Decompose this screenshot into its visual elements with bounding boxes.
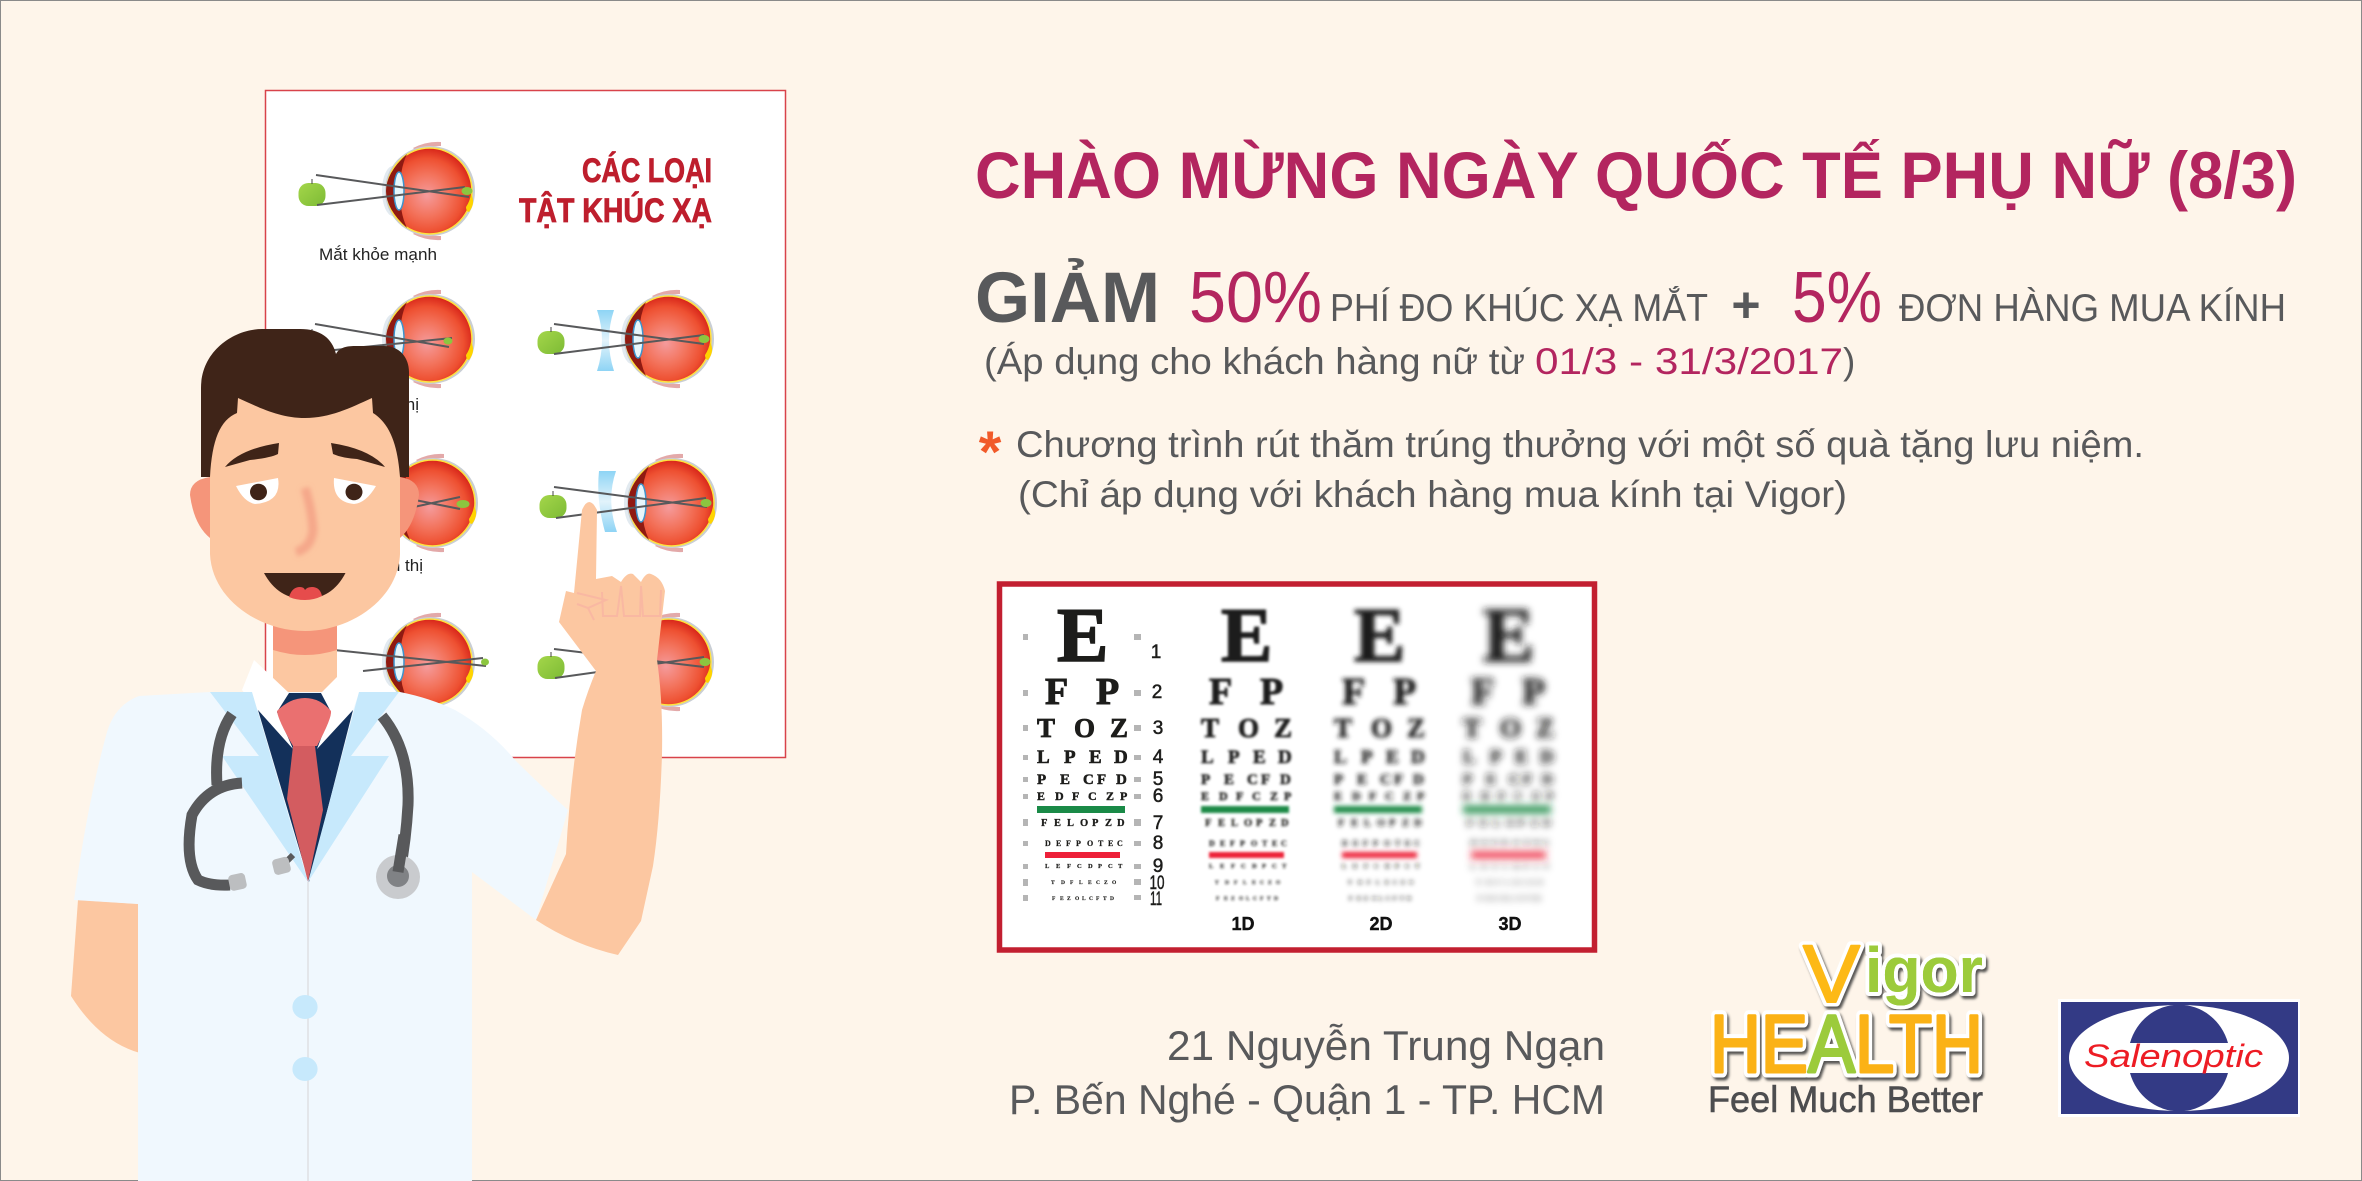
logo wordmark Vigor: igor (1865, 934, 1983, 1006)
diagram: corrected astigmatism eye (538, 613, 714, 711)
50 percent: 50% (1189, 258, 1322, 338)
eye chart: 2D blur column: FELOPZD (1338, 818, 1422, 829)
panel: refractive errors poster (266, 90, 786, 758)
eye chart: 2D blur column: EDFCZP (1334, 789, 1424, 803)
eye chart: 1D blur column: LEFCDPCT (1209, 863, 1287, 870)
illustration: doctor (71, 329, 665, 1181)
eye chart: column labels: 3D (1498, 914, 1522, 934)
eye chart: 3D blur column: FEZOLCFTD (1478, 896, 1540, 902)
eye chart: line numbers: 4 (1153, 747, 1164, 768)
doctor right arm and pointing hand (536, 502, 665, 955)
eye chart: 1D blur column: FP (1209, 671, 1283, 713)
coat centre seam (307, 882, 309, 1181)
eye chart: 2D blur column: PECFD (1334, 772, 1424, 788)
eye chart: line numbers: 5 (1153, 769, 1163, 790)
eye chart: column labels (1231, 914, 1522, 934)
eye test fee: PHÍ ĐO KHÚC XẠ MẮT (1330, 286, 1708, 330)
lucky draw note (1016, 424, 2144, 515)
hand finger creases (577, 586, 661, 620)
eye chart: 2D blur column (1334, 592, 1425, 902)
address: 21 Nguyễn Trung Ngạn (1167, 1022, 1605, 1069)
eye chart: line numbers: 7 (1153, 813, 1163, 834)
5 percent: 5% (1792, 258, 1882, 338)
lucky draw note: Chương trình rút thăm trúng thưởng với một số quà tặng lưu niệm. (1016, 424, 2144, 465)
eye chart: sharp column: FEZOLCFTD (1052, 896, 1114, 902)
eye chart: 1D blur column: LPED (1201, 747, 1292, 768)
eye chart: sharp column (1037, 592, 1128, 902)
order discount: ĐƠN HÀNG MUA KÍNH (1899, 287, 2286, 330)
doctor face (210, 390, 400, 631)
doctor eyebrows (225, 443, 385, 467)
eye chart: sharp column: EDFCZP (1037, 789, 1127, 803)
diagram: hyperopia eye (385, 454, 478, 552)
eye chart: 3D blur column: DEFPOTEC (1471, 839, 1549, 848)
eye chart: line numbers (1150, 642, 1164, 910)
eye chart: 1D blur column: PECFD (1201, 772, 1291, 788)
eye chart: 1D blur column: FEZOLCFTD (1216, 896, 1278, 902)
diagram: corrected hyperopia eye (540, 454, 717, 552)
logo wordmark Vigor: V (1803, 929, 1860, 1020)
eye chart: acuity side marks (1023, 634, 1141, 901)
applicable dates (984, 341, 1855, 382)
eye chart: 2D blur column: FEZOLCFTD (1349, 896, 1411, 902)
eye chart: 3D blur column (1463, 592, 1554, 902)
word: discount: GIẢM (975, 259, 1160, 338)
eye chart: 2D blur column: LEFCDPCT (1342, 863, 1420, 870)
eye chart: line numbers: 9 (1153, 856, 1163, 877)
logo wordmark Vigor: V (1803, 929, 1860, 1020)
eye chart: sharp column: FP (1045, 671, 1119, 713)
poster heading: TẬT KHÚC XẠ (519, 192, 712, 230)
eye chart: 3D blur column: LPED (1463, 747, 1554, 768)
eye chart: 2D blur column: TOZ (1334, 713, 1425, 743)
diagram: myopia eye (298, 290, 475, 388)
doctor coat (74, 692, 568, 1181)
doctor collar (242, 660, 360, 749)
eye chart: 3D blur column: EDFCZP (1463, 789, 1553, 803)
logo tagline: Feel Much Better (1708, 1079, 1983, 1120)
eye chart: sharp column: DEFPOTEC (1045, 839, 1123, 848)
logo wordmark Vigor (1803, 929, 1983, 1020)
panel: eye chart (1000, 584, 1594, 950)
diagram: astigmatism eye (315, 613, 489, 711)
doctor lapels (210, 692, 399, 882)
offer line (975, 258, 2286, 338)
eye chart: 1D blur column: FELOPZD (1205, 818, 1289, 829)
eye chart: column labels: 1D (1231, 914, 1255, 934)
logo wordmark Health: HEALTH (1710, 999, 1983, 1090)
eye chart: sharp column: LPED (1037, 747, 1128, 768)
eye chart: 3D blur column: FP (1471, 671, 1545, 713)
eye chart: 3D blur column: PECFD (1463, 772, 1553, 788)
eye chart: sharp column: TOZ (1037, 713, 1128, 743)
doctor neck (273, 620, 337, 700)
address (1009, 1022, 1605, 1123)
doctor left arm (71, 900, 140, 1053)
title: CHÀO MỪNG NGÀY QUỐC TẾ PHỤ NỮ (8/3) (975, 138, 2297, 212)
eye chart: line numbers: 2 (1152, 682, 1162, 703)
poster heading (519, 152, 712, 230)
logo: Salenoptic (2058, 999, 2300, 1117)
eye chart: 1D blur column: TDFLECZO (1215, 880, 1281, 886)
doctor mouth (264, 573, 346, 600)
plus sign: + (1731, 277, 1761, 333)
diagram: corrected myopia eye (538, 290, 714, 388)
label: hyperopia: Viễn thị (367, 556, 423, 575)
coat buttons (292, 995, 318, 1081)
asterisk: * (979, 420, 1002, 485)
eye chart: line numbers: 1 (1151, 642, 1161, 663)
eye chart: 1D blur column: TOZ (1201, 713, 1292, 743)
label: healthy eye: Mắt khỏe mạnh (319, 245, 437, 264)
doctor nose (296, 488, 313, 552)
eye chart: 2D blur column: E (1354, 592, 1405, 678)
label: myopia: Cận thị (365, 395, 419, 414)
logo: Salenoptic: Salenoptic (2084, 1038, 2263, 1074)
eye chart: column labels: 2D (1369, 914, 1393, 934)
eye chart: 2D blur column: TDFLECZO (1348, 880, 1414, 886)
eye chart: sharp column: FELOPZD (1041, 818, 1125, 829)
eye chart: line numbers: 11 (1150, 889, 1162, 910)
doctor eyes (236, 478, 376, 504)
eye chart: 1D blur column: E (1221, 592, 1272, 678)
diagram: healthy eye (298, 142, 475, 240)
eye chart: 2D blur column: FP (1342, 671, 1416, 713)
applicable dates: (Áp dụng cho khách hàng nữ từ (984, 341, 1525, 382)
eye chart: 3D blur column: E (1483, 592, 1534, 678)
poster heading: CÁC LOẠI (582, 152, 712, 190)
eye chart: line numbers: 10 (1150, 873, 1164, 894)
eye chart: sharp column: PECFD (1037, 772, 1127, 788)
logo wordmark Health: HEALTH (1710, 999, 1983, 1090)
eye chart: 3D blur column: LEFCDPCT (1471, 863, 1549, 870)
eye chart: 1D blur column (1201, 592, 1292, 902)
eye chart: line numbers: 8 (1153, 833, 1163, 854)
eye chart: 3D blur column: TDFLECZO (1477, 880, 1543, 886)
eye chart: 3D blur column: FELOPZD (1467, 818, 1551, 829)
lucky draw note: (Chỉ áp dụng với khách hàng mua kính tại Vigor) (1018, 474, 1847, 515)
eye chart: line numbers: 6 (1153, 786, 1163, 807)
eye chart: 2D blur column: DEFPOTEC (1342, 839, 1420, 848)
doctor tie (277, 698, 331, 882)
doctor shirt (258, 693, 353, 882)
doctor hair (201, 329, 409, 477)
address: P. Bến Nghé - Quận 1 - TP. HCM (1009, 1076, 1605, 1123)
eye chart: 2D blur column: LPED (1334, 747, 1425, 768)
applicable dates: ) (1843, 341, 1855, 382)
eye chart: sharp column: TDFLECZO (1051, 880, 1117, 886)
eye chart: 3D blur column: TOZ (1463, 713, 1554, 743)
logo wordmark Vigor: igor (1865, 934, 1983, 1006)
eye chart: 1D blur column: EDFCZP (1201, 789, 1291, 803)
eye chart: line numbers: 3 (1153, 718, 1163, 739)
doctor ears (190, 477, 419, 538)
logo: Vigor Health (1708, 929, 1983, 1120)
applicable dates: 01/3 - 31/3/2017 (1535, 341, 1843, 382)
eye chart: sharp column: E (1057, 592, 1108, 678)
eye chart: sharp column: LEFCDPCT (1045, 863, 1123, 870)
eye chart: 1D blur column: DEFPOTEC (1209, 839, 1287, 848)
stethoscope (189, 714, 420, 899)
